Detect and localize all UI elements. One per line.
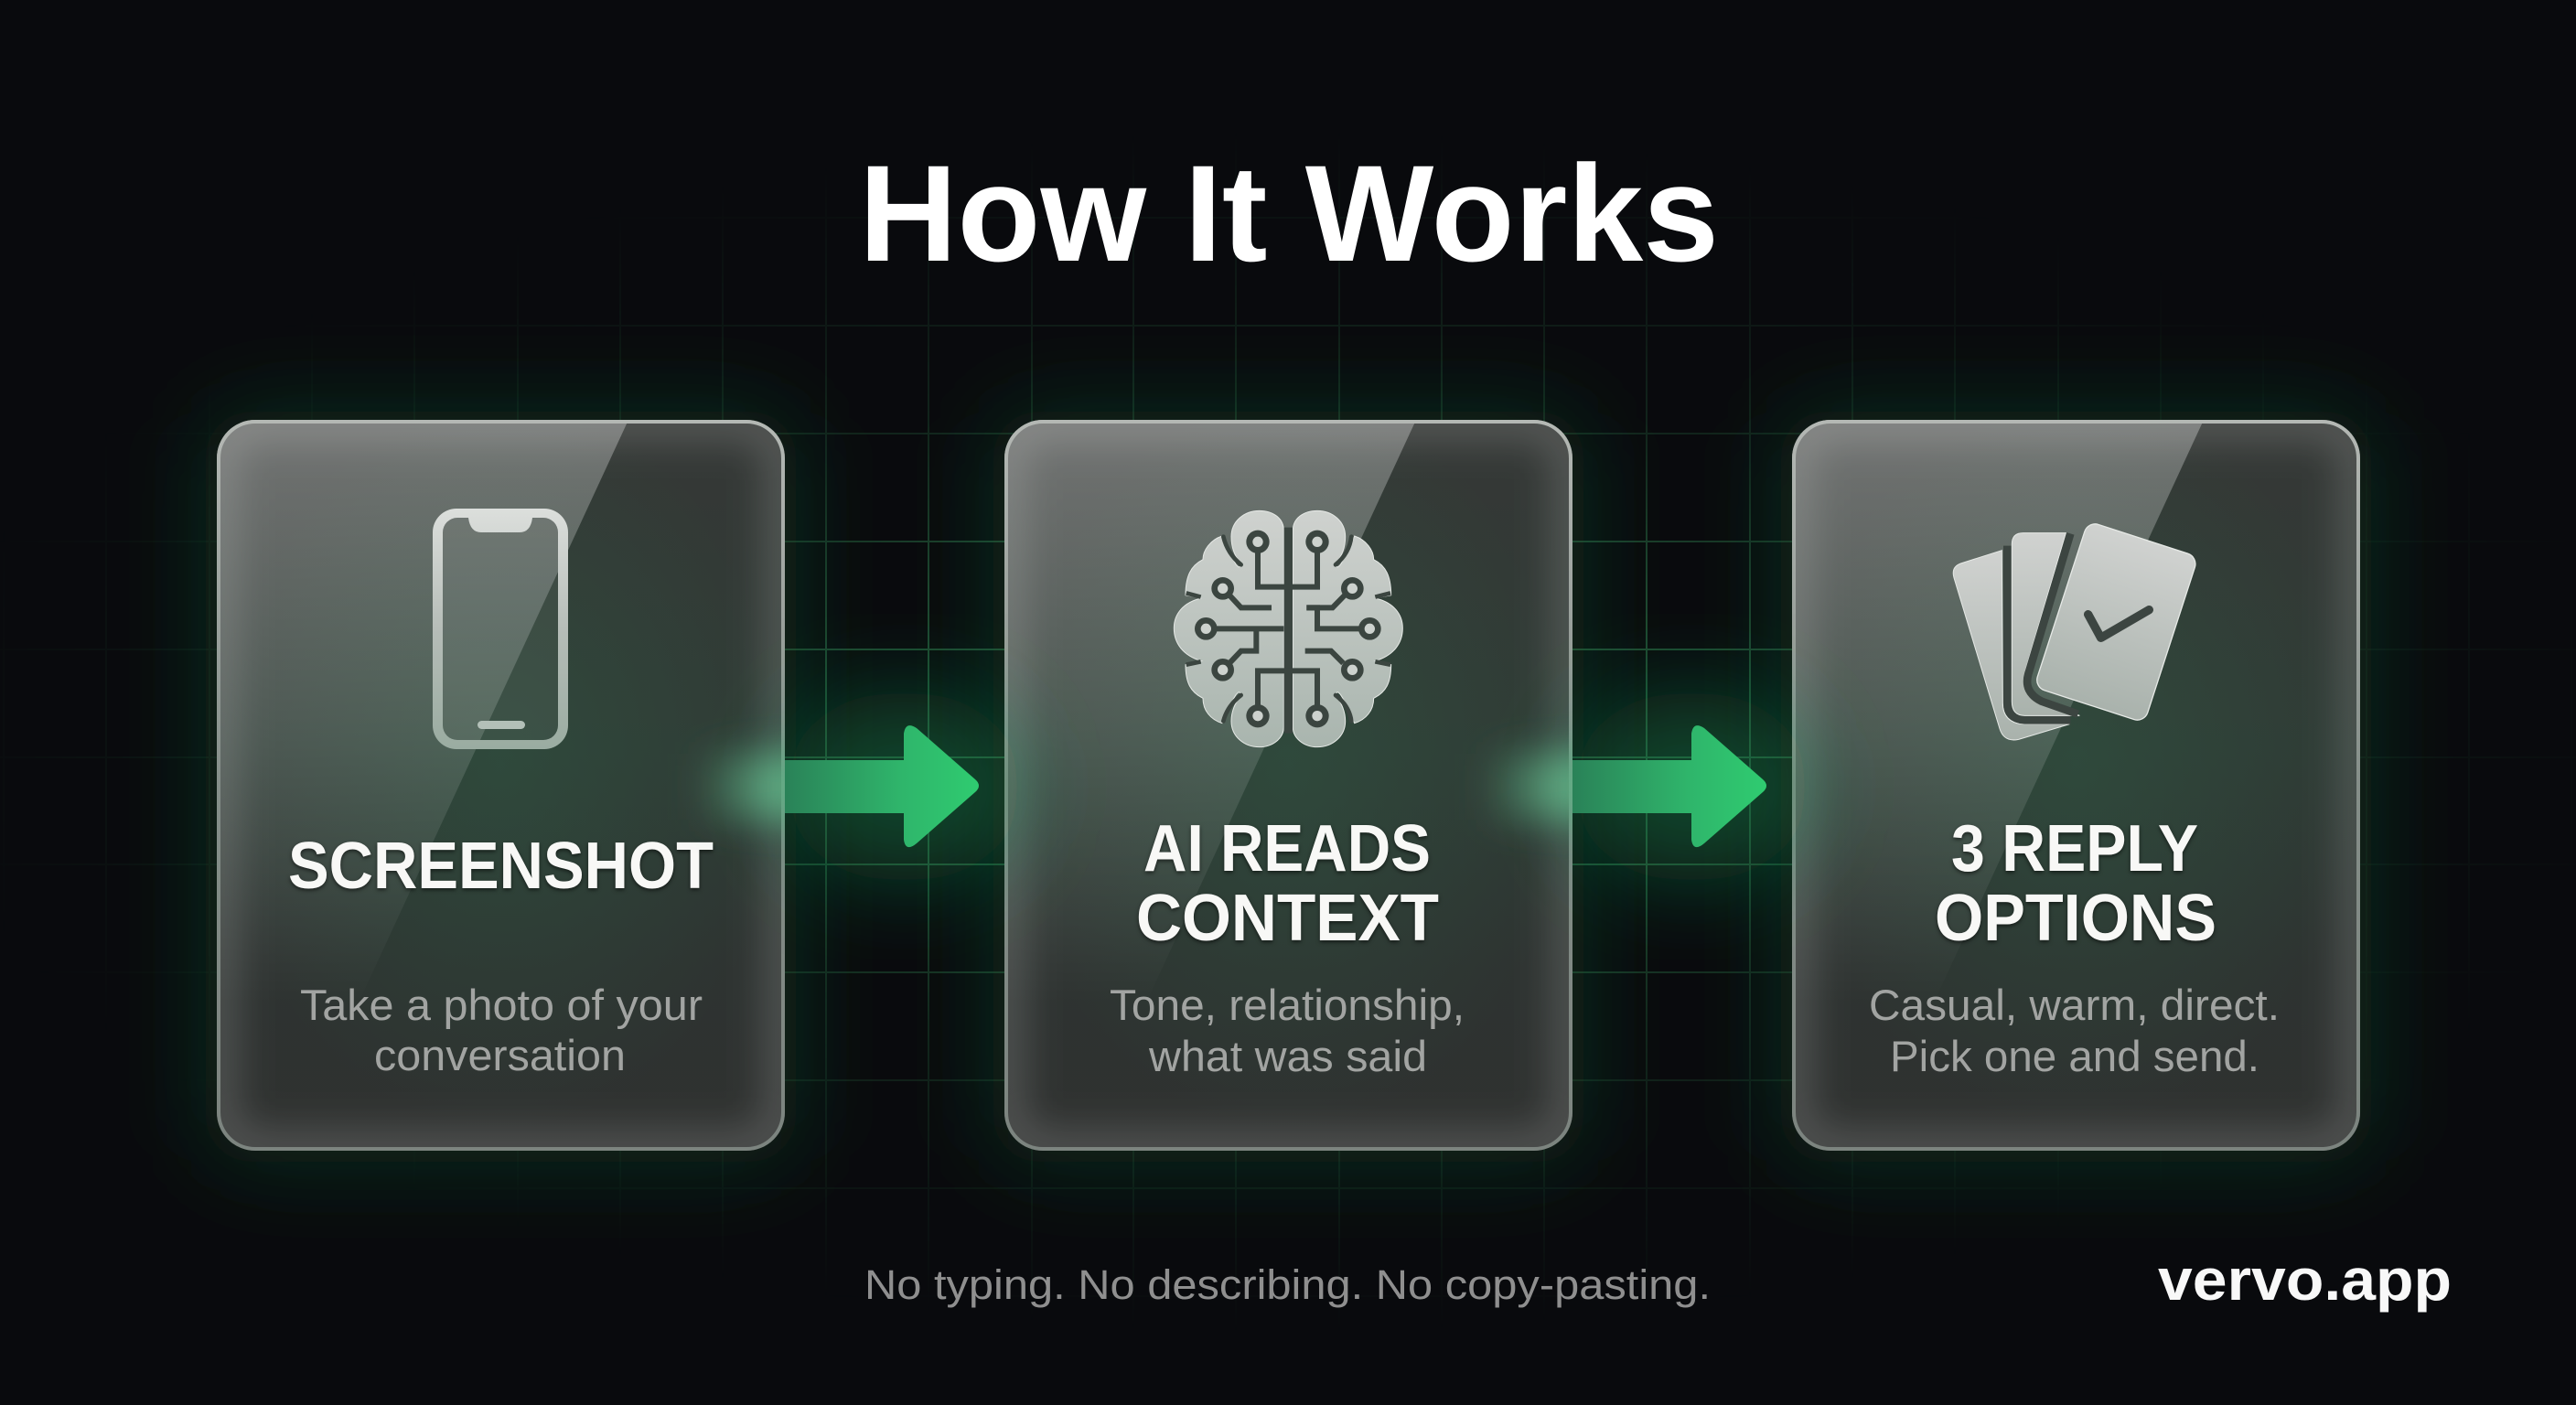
description: screenshot [300,981,703,1079]
description: AI reads context [1110,981,1465,1080]
arrow: AI to reply options [1481,691,1810,883]
description: AI reads context: Tone, relationship, [1110,981,1465,1029]
description: 3 reply options [1869,981,2280,1080]
brand url: vervo.app [2158,1247,2452,1313]
panel: 3 reply options step [1792,420,2360,1151]
arrow: screenshot to AI [693,691,1023,883]
footer tagline: No typing. No describing. No copy-pasting. [864,1261,1711,1308]
icon: phone [433,509,568,749]
description: 3 reply options: Pick one and send. [1890,1032,2259,1080]
background grid [123,218,2453,1245]
description: screenshot: conversation [374,1031,626,1079]
heading: AI reads context: AI READS [1143,812,1431,885]
heading: 3 reply options [1935,812,2216,955]
heading: screenshot: SCREENSHOT [288,830,714,903]
description: AI reads context: what was said [1148,1032,1427,1080]
title: How It Works [859,136,1719,290]
description: 3 reply options: Casual, warm, direct. [1869,981,2280,1029]
panel: screenshot step [217,420,785,1151]
green glow behind cards [206,412,2371,1162]
heading: AI reads context: CONTEXT [1136,882,1439,955]
heading: AI reads context [1136,812,1439,955]
icon: stacked reply cards [1953,521,2198,740]
heading: 3 reply options: OPTIONS [1935,882,2216,955]
panel: AI reads context step [1004,420,1572,1151]
icon: brain circuit [1174,510,1402,747]
heading: 3 reply options: 3 REPLY [1951,812,2198,885]
description: screenshot: Take a photo of your [300,981,703,1029]
